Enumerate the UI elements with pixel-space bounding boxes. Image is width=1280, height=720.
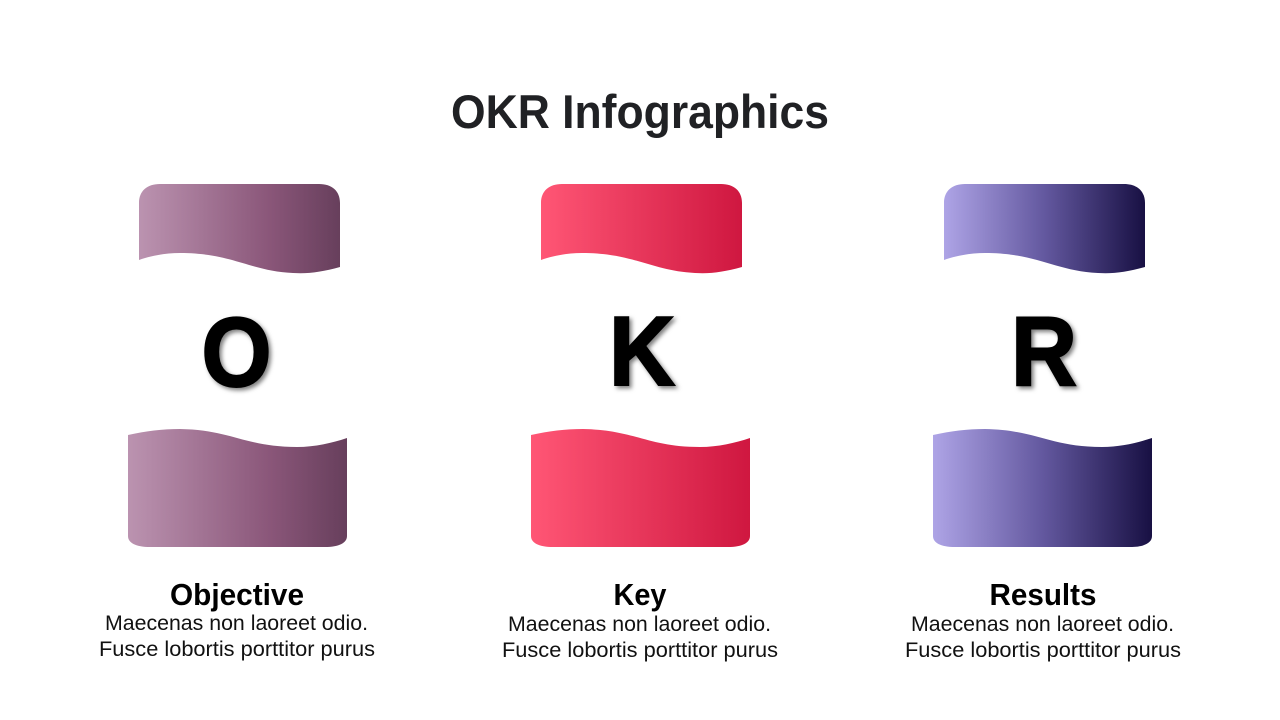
title: OKR Infographics	[451, 85, 829, 138]
heading: Objective: Objective	[170, 577, 304, 612]
column: Objective	[99, 184, 375, 661]
top wave shape: objective	[139, 184, 340, 273]
top wave shape: results	[944, 184, 1145, 273]
column: Key	[502, 184, 778, 662]
column: Results	[905, 184, 1181, 662]
text block: key description: Maecenas non laoreet odio.	[508, 613, 771, 636]
text block: results description: Fusce lobortis porttitor purus	[905, 639, 1181, 662]
text block: key description	[502, 613, 778, 662]
text block: key description: Fusce lobortis porttitor purus	[502, 639, 778, 662]
text block: results description: Maecenas non laoreet odio.	[911, 613, 1174, 636]
letter K: K	[609, 296, 675, 406]
heading: Key: Key	[614, 577, 667, 612]
text block: objective description	[99, 612, 375, 661]
letter O: O	[202, 297, 272, 407]
bottom wave shape: key	[531, 429, 750, 547]
letter R: R	[1011, 296, 1077, 406]
top wave shape: key	[541, 184, 742, 273]
text block: objective description: Maecenas non laoreet odio.	[105, 612, 368, 635]
heading: Results: Results	[990, 577, 1096, 612]
text block: objective description: Fusce lobortis porttitor purus	[99, 638, 375, 661]
bottom wave shape: objective	[128, 429, 347, 547]
text block: results description	[905, 613, 1181, 662]
bottom wave shape: results	[933, 429, 1152, 547]
